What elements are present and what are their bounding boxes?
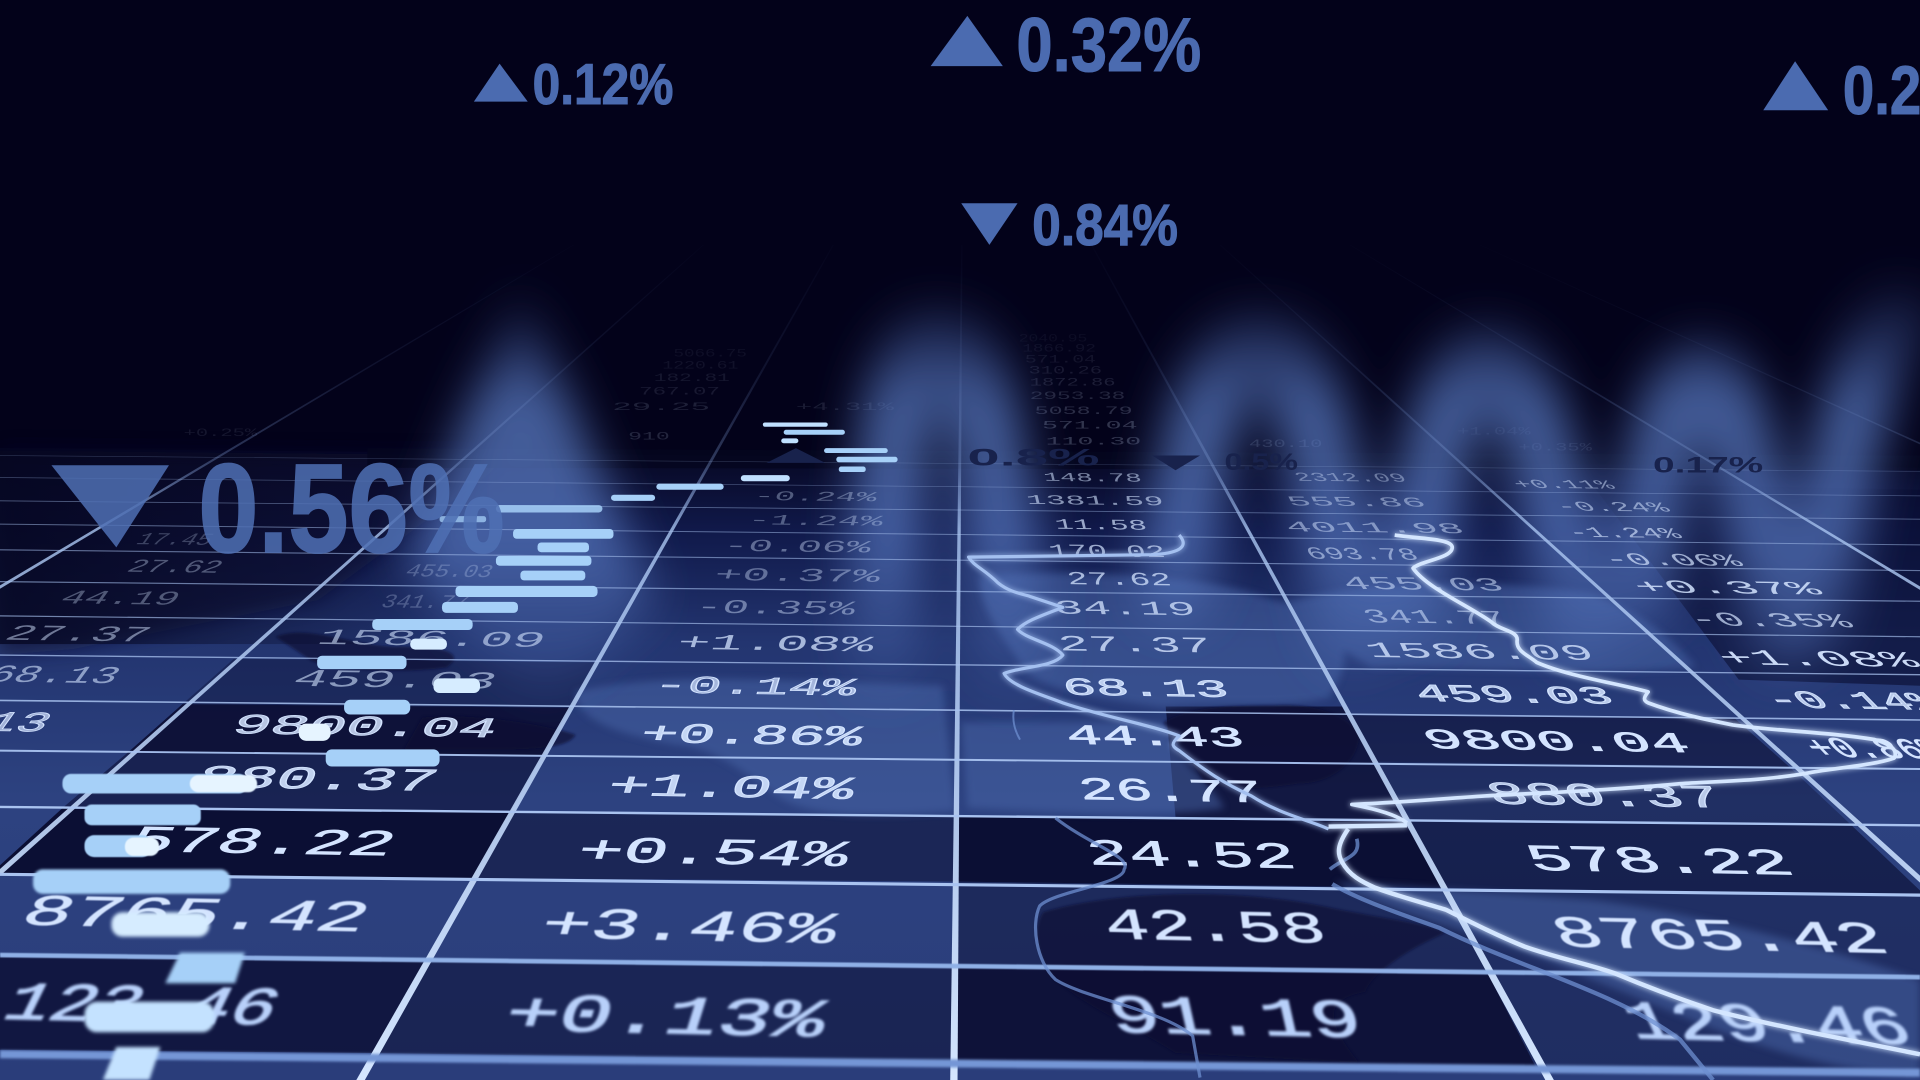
percent label: up 0.32% [931,3,1201,88]
table numbers: -1.24% [745,512,885,531]
upper distant table numbers: +0.35% [1518,443,1593,455]
table numbers: 27.62 [121,557,228,579]
percent label: down 0.84% [961,193,1178,258]
table numbers: 4011.98 [1280,519,1469,538]
table numbers: 68.13 [1060,675,1232,705]
blurred background line chart [404,288,1900,722]
table numbers: +0.37% [711,564,885,588]
upper distant table numbers: 2040.95 [1019,334,1087,346]
table numbers: 693.78 [1301,544,1424,565]
upper distant table numbers: 182.81 [654,373,731,385]
map land masses [576,573,1920,1078]
table numbers: 129.46 [1614,994,1920,1062]
percent label: up 0.2 [1763,52,1920,129]
upper distant table numbers [184,334,1593,455]
table numbers: 2312.09 [1292,472,1411,486]
upper distant table numbers: 310.26 [1029,365,1102,377]
upper distant table numbers: 571.04 [1025,354,1097,366]
table numbers: -0.14% [650,672,860,703]
table numbers: 170.02 [1047,543,1168,563]
table numbers: +0.37% [1625,577,1831,600]
table numbers: 42.58 [1100,903,1331,957]
table numbers: -0.24% [752,490,880,506]
dark map coast shapes [276,633,1445,1063]
upper distant table numbers: 29.25 [612,402,710,414]
table numbers: +1.08% [1709,647,1920,674]
dark table cells [0,451,1920,1078]
column grid lines [0,245,1920,1080]
table numbers: +1.04% [603,769,860,809]
upper distant table numbers: 910 [628,432,670,444]
percent label: up 0.12%: 0.12% [533,53,673,117]
upper distant table numbers: 5066.75 [673,348,747,360]
table numbers: 44.19 [54,587,186,611]
table numbers: 341.77 [1358,607,1513,631]
table numbers: 9800.04 [1417,726,1698,762]
table numbers: 27.62 [1065,568,1174,591]
table numbers: 148.78 [1042,471,1143,486]
table numbers: -0.06% [1597,551,1751,572]
percent label: up 0.32%: 0.32% [1016,3,1201,88]
upper distant table numbers: 1866.92 [1022,343,1096,355]
upper distant table numbers: +0.25% [184,428,258,440]
table numbers: -0.06% [721,537,875,558]
table numbers: 8765.42 [12,888,379,944]
data table floor [0,448,1920,1080]
upper distant table numbers: 1872.86 [1030,378,1116,390]
percent label: down 0.56% [51,438,504,579]
candlestick bars [33,422,898,1080]
table numbers: 455.03 [1337,574,1510,597]
percent label: down 0.84%: 0.84% [1032,193,1178,258]
table numbers: 27.37 [0,623,156,649]
left side shading [0,448,441,644]
faint reflected percent labels: 0.17% [1653,453,1764,478]
faint reflected percent labels [767,444,1764,478]
table numbers: 91.19 [1103,987,1368,1054]
table numbers: 17.45 [131,530,218,550]
table numbers: +3.46% [534,901,843,956]
upper distant table numbers: 571.04 [1042,421,1138,433]
table numbers: 9800.04 [225,710,504,746]
table numbers: 11.58 [1053,518,1149,535]
mid blue trace line [969,535,1329,829]
table numbers: 8765.42 [1543,910,1899,967]
dark divider band [367,448,1920,470]
table numbers: 455.03 [401,561,497,583]
table numbers: 44.43 [1063,720,1248,755]
table numbers: 27.37 [1055,632,1214,659]
dim chart trace lines [1013,710,1713,1080]
table numbers: 459.03 [287,666,502,696]
row grid lines [0,456,1920,1073]
table numbers: 578.22 [1518,839,1802,886]
table numbers: -0.14% [1756,687,1920,718]
table numbers: 880.37 [1479,777,1732,818]
table numbers: -0.24% [1550,499,1676,516]
table numbers: 555.86 [1283,494,1431,511]
table numbers: -0.35% [692,597,858,621]
bright trace lines [1329,535,1920,1054]
table numbers: 1381.59 [1025,494,1166,510]
table numbers [0,469,1920,1078]
upper distant table numbers: 430.10 [1249,439,1322,451]
upper distant table numbers: 5058.79 [1035,406,1133,418]
table numbers: 578.22 [120,821,403,867]
percent label: down 0.56%: 0.56% [198,438,504,579]
table numbers: -0.35% [1680,610,1863,634]
table numbers: 24.52 [1083,835,1300,880]
table numbers: 341.77 [376,592,473,615]
upper distant table numbers: 1220.61 [662,361,739,373]
table numbers: 459.03 [1409,682,1621,712]
faint reflected percent labels: 0.8% [967,444,1100,471]
faint reflected percent labels: 0.5% [1224,449,1298,476]
table numbers: 34.19 [1052,597,1198,621]
table numbers: -1.24% [1562,525,1689,543]
table numbers: +0.54% [572,832,855,878]
upper distant table numbers: +1.04% [1457,427,1531,439]
table numbers: 26.77 [1075,772,1267,812]
table numbers: 880.37 [188,761,444,801]
table numbers: 1586.09 [312,626,550,654]
percent label: up 0.12% [474,53,673,117]
upper distant table numbers: 2953.38 [1030,391,1125,403]
table numbers: +1.08% [674,630,879,658]
upper distant table numbers: +4.31% [796,402,895,414]
table numbers: +0.86% [636,719,868,754]
table numbers: 1586.09 [1360,639,1602,667]
table numbers: +0.13% [497,985,836,1053]
table numbers: +0.11% [1509,478,1620,493]
upper distant table numbers: 110.30 [1046,436,1141,448]
upper distant table numbers: 767.07 [639,386,720,398]
